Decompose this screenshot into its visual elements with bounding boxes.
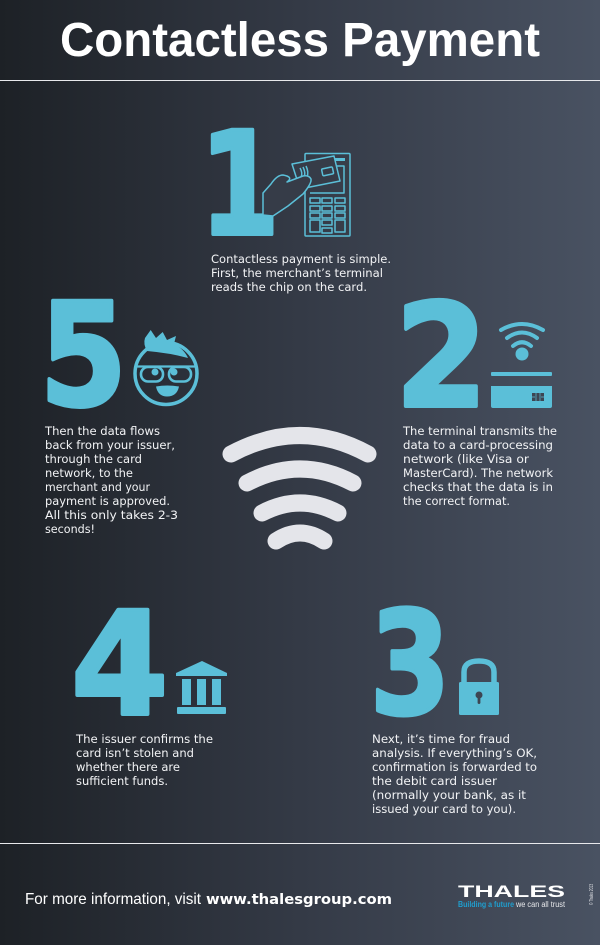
icon: central contactless waves [231,436,368,541]
footer call to action [25,891,392,908]
step 5 text: payment is approved. [45,495,170,508]
step 3 text: Next, it’s time for fraud [372,733,510,746]
step 5 text [44,425,178,536]
panel: step 4 [71,583,227,788]
step 3 text [372,733,537,816]
copyright note: © Thales 2013 [588,884,595,905]
step 5 text: network, to the [45,467,133,480]
step 3 text: confirmation is forwarded to [372,761,537,774]
logo: Thales [458,882,566,909]
step 4 text: The issuer confirms the [75,733,213,746]
step 4 text: card isn’t stolen and [76,747,194,760]
step 2 text: The terminal transmits the [402,425,557,438]
step 2 text: network (like Visa or [403,453,529,466]
panel: step 1 [199,101,391,294]
icon: padlock [459,661,499,715]
footer call to action: For more information, visit [25,891,202,908]
step 5 text: All this only takes 2-3 [45,509,178,522]
step 1 text: Contactless payment is simple. [211,253,391,266]
icon: payment terminal and hand with card [263,154,350,236]
step 2 text [402,425,557,508]
number 2: 2 [395,273,488,440]
step 4 text [75,733,213,788]
title: Contactless Payment [60,14,540,67]
step 5 text: through the card [45,453,142,466]
icon: wifi signal and card [491,324,552,408]
step 2 text: the correct format. [403,495,510,508]
step 3 text: the debit card issuer [372,775,497,788]
icon: bank building [176,661,227,714]
step 1 text: reads the chip on the card. [211,281,367,294]
panel: step 5 [40,272,197,536]
step 2 text: MasterCard). The network [403,467,554,480]
panel: step 3 [370,581,537,816]
step 4 text: whether there are [76,761,180,774]
step 4 text: sufficient funds. [76,775,168,788]
panel: step 2 [395,273,557,508]
logo: Thales: THALES [458,882,565,901]
step 3 text: issued your card to you). [372,803,516,816]
number 4: 4 [71,583,169,748]
step 5 text: seconds! [45,523,95,536]
number 1: 1 [199,101,280,268]
step 1 text: First, the merchant’s terminal [211,267,383,280]
step 5 text: merchant and your [45,481,150,494]
footer call to action: www.thalesgroup.com [206,892,392,908]
number 3: 3 [370,581,450,748]
step 2 text: checks that the data is in [403,481,553,494]
step 5 text: back from your issuer, [45,439,175,452]
number 5: 5 [40,272,127,439]
step 3 text: analysis. If everything’s OK, [372,747,537,760]
step 3 text: (normally your bank, as it [372,789,527,802]
step 5 text: Then the data flows [44,425,160,438]
logo: Thales: Building a future [458,900,514,909]
step 1 text [211,253,391,294]
logo: Thales: we can all trust [515,900,566,909]
icon: smiling face with glasses [135,330,197,404]
step 2 text: data to a card-processing [403,439,553,452]
